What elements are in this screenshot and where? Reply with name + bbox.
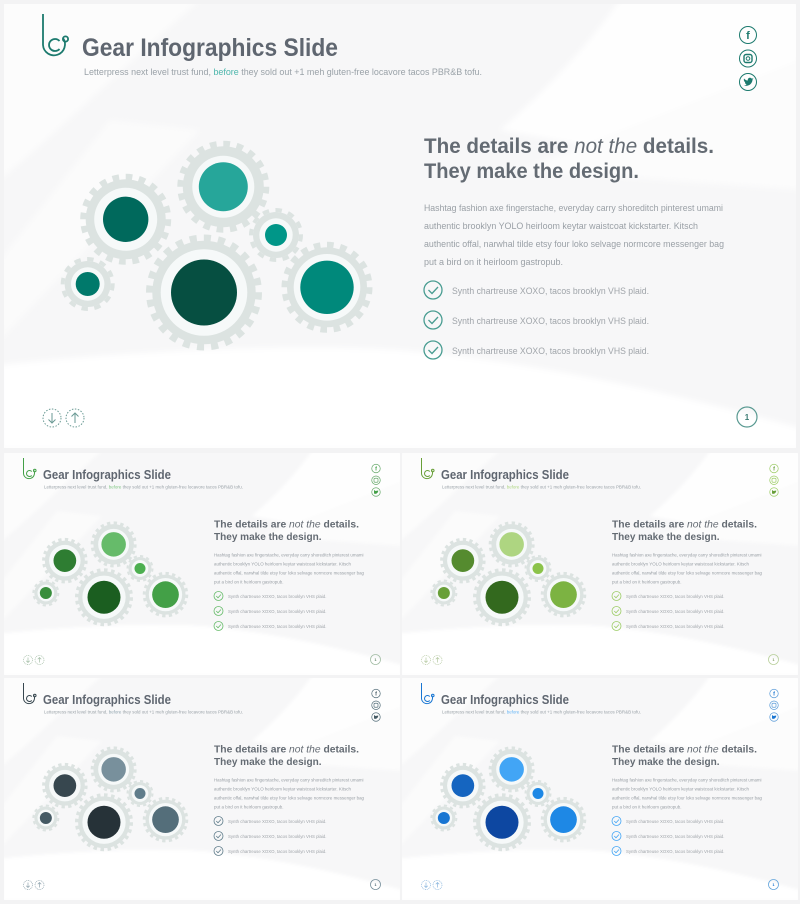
navigation arrows [422,880,442,890]
page number: 1 [745,413,750,422]
body paragraph: put a bird on it heirloom gastropub. [612,580,682,586]
gear: small left [33,806,58,830]
body paragraph: Hashtag fashion axe fingerstache, everyday carry shoreditch pinterest umami [214,552,364,558]
heading: The details are not the details. [424,135,714,158]
check list [214,816,326,856]
gear: large dark [475,570,529,624]
gear: top [92,523,135,566]
gear: top [180,144,266,230]
check list: Synth chartreuse XOXO, tacos brooklyn VHS plaid. [228,819,326,825]
body paragraph: Hashtag fashion axe fingerstache, everyday carry shoreditch pinterest umami [214,778,364,784]
page number [737,407,757,427]
social icons: f [773,692,775,698]
gear cluster [431,748,585,850]
logo [422,458,434,479]
title: Gear Infographics Slide [441,468,569,482]
social icons [770,464,778,496]
gear: large dark [77,795,131,850]
gear cluster [33,523,187,624]
logo [422,683,434,704]
body paragraph: authentic brooklyn YOLO heirloom keytar waistcoat kickstarter. Kitsch [214,786,351,792]
page number: 1 [772,657,775,662]
page number: 1 [374,657,377,662]
body paragraph: put a bird on it heirloom gastropub. [424,257,563,268]
gear: right [542,573,585,616]
gear: right [542,798,585,841]
title: Gear Infographics Slide [82,34,338,62]
body paragraph [214,778,364,810]
heading [612,744,757,768]
panel: blue-grey slide [2,676,402,901]
body paragraph [612,552,762,586]
gear cluster [63,144,369,347]
body paragraph: authentic offal, narwhal tilde etsy four loko selvage normcore messenger bag [214,796,364,802]
heading: They make the design. [612,756,720,768]
heading [214,518,359,543]
body paragraph [424,203,724,268]
page number: 1 [772,882,775,887]
check list [612,592,724,630]
body paragraph: Hashtag fashion axe fingerstache, everyday carry shoreditch pinterest umami [612,778,762,784]
body paragraph: put a bird on it heirloom gastropub. [214,580,284,586]
page number [370,880,380,890]
gear: right [284,245,370,330]
body paragraph: authentic brooklyn YOLO heirloom keytar waistcoat kickstarter. Kitsch [424,221,698,232]
body paragraph: put a bird on it heirloom gastropub. [214,804,284,810]
body paragraph: authentic offal, narwhal tilde etsy four loko selvage normcore messenger bag [424,239,724,250]
title: Gear Infographics Slide [441,693,569,707]
heading: They make the design. [214,531,322,543]
body paragraph: authentic offal, narwhal tilde etsy four loko selvage normcore messenger bag [214,570,364,576]
check list: Synth chartreuse XOXO, tacos brooklyn VHS plaid. [626,624,724,630]
social icons: f [773,466,775,472]
check list: Synth chartreuse XOXO, tacos brooklyn VHS plaid. [626,609,724,615]
gear: left [442,764,484,807]
body paragraph: put a bird on it heirloom gastropub. [612,804,682,810]
title: Gear Infographics Slide [43,693,171,707]
check list: Synth chartreuse XOXO, tacos brooklyn VHS plaid. [228,834,326,840]
body paragraph: authentic brooklyn YOLO heirloom keytar waistcoat kickstarter. Kitsch [214,562,351,568]
body paragraph: authentic brooklyn YOLO heirloom keytar waistcoat kickstarter. Kitsch [612,786,749,792]
body paragraph [612,778,762,810]
gear: top [490,523,533,566]
gear: small right [526,556,550,581]
social icons [372,689,380,721]
heading [612,518,757,543]
social icons [770,689,778,721]
gear: small right [251,210,301,260]
gear: right [144,798,187,841]
heading: They make the design. [612,531,720,543]
gear: left [44,539,86,582]
gear: left [44,764,86,807]
check list: Synth chartreuse XOXO, tacos brooklyn VHS plaid. [452,286,649,297]
check list: Synth chartreuse XOXO, tacos brooklyn VHS plaid. [228,594,326,600]
gear: small right [128,781,152,806]
heading [424,135,714,183]
panel: blue slide [400,676,800,901]
gear: small left [33,580,58,606]
logo [43,14,68,55]
title: Gear Infographics Slide [43,468,171,482]
heading: The details are not the details. [612,518,757,530]
gear cluster [33,748,187,850]
gear: right [144,573,187,616]
body paragraph: authentic offal, narwhal tilde etsy four loko selvage normcore messenger bag [612,796,762,802]
check list: Synth chartreuse XOXO, tacos brooklyn VHS plaid. [228,609,326,615]
gear: large dark [475,795,529,850]
gear: small left [63,259,113,309]
navigation arrows [24,656,44,664]
heading: They make the design. [424,160,639,183]
check list [424,281,649,359]
check list: Synth chartreuse XOXO, tacos brooklyn VHS plaid. [626,819,724,825]
body paragraph: Hashtag fashion axe fingerstache, everyday carry shoreditch pinterest umami [424,203,723,214]
heading: They make the design. [214,756,322,768]
panel: light green slide [400,451,800,676]
subtitle: Letterpress next level trust fund, before they sold out +1 meh gluten-free locavore tacos PBR&B tofu. [44,484,243,490]
page number [768,880,778,890]
page number [768,654,778,664]
social icons: f [375,692,377,698]
gear cluster [431,523,585,624]
gear: large dark [77,570,131,624]
panel: green slide [2,451,402,676]
gear: large dark [150,238,258,347]
navigation arrows [43,409,84,427]
check list: Synth chartreuse XOXO, tacos brooklyn VHS plaid. [626,849,724,855]
heading: The details are not the details. [214,744,359,756]
check list: Synth chartreuse XOXO, tacos brooklyn VHS plaid. [452,346,649,357]
navigation arrows [24,880,44,890]
check list: Synth chartreuse XOXO, tacos brooklyn VHS plaid. [626,594,724,600]
navigation arrows [422,656,442,664]
page number [370,654,380,664]
gear: left [83,177,168,262]
gear: left [442,539,484,582]
social icons [740,26,756,90]
heading [214,744,359,768]
check list: Synth chartreuse XOXO, tacos brooklyn VHS plaid. [452,316,649,327]
check list: Synth chartreuse XOXO, tacos brooklyn VHS plaid. [228,624,326,630]
subtitle: Letterpress next level trust fund, before they sold out +1 meh gluten-free locavore tacos PBR&B tofu. [84,67,482,78]
body paragraph [214,552,364,586]
check list: Synth chartreuse XOXO, tacos brooklyn VHS plaid. [626,834,724,840]
logo [24,458,36,479]
body paragraph: authentic offal, narwhal tilde etsy four loko selvage normcore messenger bag [612,570,762,576]
gear: small left [431,806,456,830]
gear: small right [526,781,550,806]
gear: small right [128,556,152,581]
subtitle: Letterpress next level trust fund, before they sold out +1 meh gluten-free locavore tacos PBR&B tofu. [44,710,243,716]
panel: main teal slide [0,0,800,450]
social icons: f [746,30,750,42]
page number: 1 [374,882,377,887]
subtitle: Letterpress next level trust fund, before they sold out +1 meh gluten-free locavore tacos PBR&B tofu. [442,710,641,716]
gear: top [92,748,135,791]
social icons [372,464,380,496]
gear: top [490,748,533,791]
logo [24,683,36,704]
heading: The details are not the details. [612,744,757,756]
heading: The details are not the details. [214,518,359,530]
check list [214,592,326,630]
subtitle: Letterpress next level trust fund, before they sold out +1 meh gluten-free locavore tacos PBR&B tofu. [442,484,641,490]
check list [612,816,724,856]
gear: small left [431,580,456,606]
social icons: f [375,466,377,472]
check list: Synth chartreuse XOXO, tacos brooklyn VHS plaid. [228,849,326,855]
body paragraph: Hashtag fashion axe fingerstache, everyday carry shoreditch pinterest umami [612,552,762,558]
body paragraph: authentic brooklyn YOLO heirloom keytar waistcoat kickstarter. Kitsch [612,562,749,568]
